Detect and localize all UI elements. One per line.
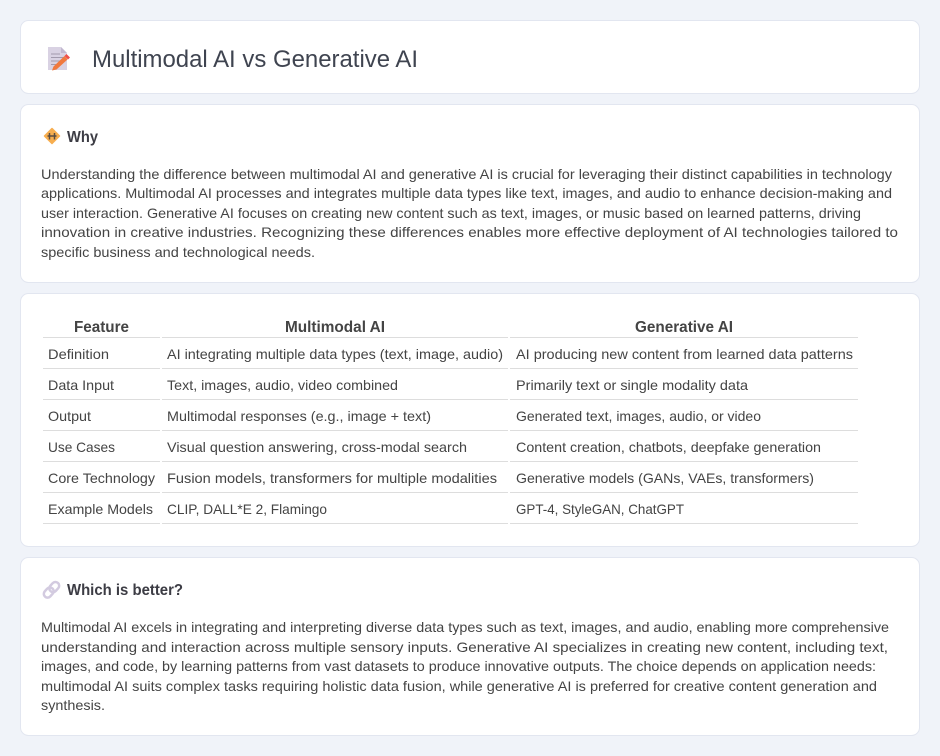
title: Multimodal AI vs Generative AI <box>92 46 418 73</box>
row: core technology: Generative models (GANs, VAEs, transformers) <box>516 470 814 486</box>
text block: why: innovation in creative industries. Recognizing these differences enables more effective deployment of AI technologies tailored to <box>41 224 898 240</box>
row: definition: AI producing new content from learned data patterns <box>516 346 853 362</box>
panel: which is better <box>20 558 920 736</box>
row: use cases <box>43 439 858 462</box>
panel: why <box>20 104 920 282</box>
row: data input: Text, images, audio, video combined <box>167 377 398 393</box>
table header: Feature <box>74 319 129 336</box>
icon: memo <box>48 47 70 70</box>
row: use cases: Content creation, chatbots, deepfake generation <box>516 439 821 455</box>
text block: why: specific business and technological needs. <box>41 244 315 260</box>
heading: why: Why <box>67 129 98 146</box>
row: definition: AI integrating multiple data types (text, image, audio) <box>167 346 503 362</box>
row: example models: CLIP, DALL*E 2, Flamingo <box>167 501 327 517</box>
text block: why <box>41 166 898 260</box>
text block: why: Understanding the difference between multimodal AI and generative AI is crucial for leveraging their distinct capabilities in technology <box>41 166 892 182</box>
row: output: Output <box>48 408 91 424</box>
row: output: Generated text, images, audio, or video <box>516 408 761 424</box>
row: core technology: Core Technology <box>48 470 155 486</box>
icon: link <box>42 580 61 599</box>
row: use cases: Use Cases <box>48 439 115 455</box>
panel: comparison table <box>20 294 920 546</box>
text block: which is better: understanding and interaction across multiple sensory inputs. Generative AI specializes in creating new content, including text, <box>41 639 888 655</box>
row: use cases: Visual question answering, cross-modal search <box>167 439 467 455</box>
row: definition: Definition <box>48 346 109 362</box>
row: example models: Example Models <box>48 501 153 517</box>
row: example models: GPT-4, StyleGAN, ChatGPT <box>516 501 684 517</box>
text block: which is better: Multimodal AI excels in integrating and interpreting diverse data types such as text, images, and audio, enabling more comprehensive <box>41 619 889 635</box>
text block: which is better <box>41 619 889 713</box>
row: output <box>43 408 858 431</box>
panel: header <box>20 20 920 94</box>
text block: why: applications. Multimodal AI processes and integrates multiple data types like text, images, and audio to enhance decision-making and <box>41 185 892 201</box>
row: data input <box>43 377 858 400</box>
icon: warning diamond <box>44 128 60 144</box>
row: example models <box>43 501 858 524</box>
row: data input: Data Input <box>48 377 114 393</box>
table header <box>43 319 858 338</box>
row: core technology <box>43 470 858 493</box>
text block: which is better: multimodal AI suits complex tasks requiring holistic data fusion, while generative AI is preferred for creative content generation and <box>41 678 877 694</box>
row: data input: Primarily text or single modality data <box>516 377 748 393</box>
row: output: Multimodal responses (e.g., image + text) <box>167 408 431 424</box>
text block: which is better: synthesis. <box>41 697 105 713</box>
row: core technology: Fusion models, transformers for multiple modalities <box>167 470 497 486</box>
table header: Generative AI <box>635 319 733 336</box>
text block: why: user interaction. Generative AI focuses on creating new content such as text, images, or music based on learned patterns, driving <box>41 205 861 221</box>
text block: which is better: images, and code, by learning patterns from vast datasets to produce innovative outputs. The choice depends on application needs: <box>41 658 876 674</box>
table header: Multimodal AI <box>285 319 385 336</box>
heading: which is better: Which is better? <box>67 582 183 599</box>
row: definition <box>43 346 858 369</box>
